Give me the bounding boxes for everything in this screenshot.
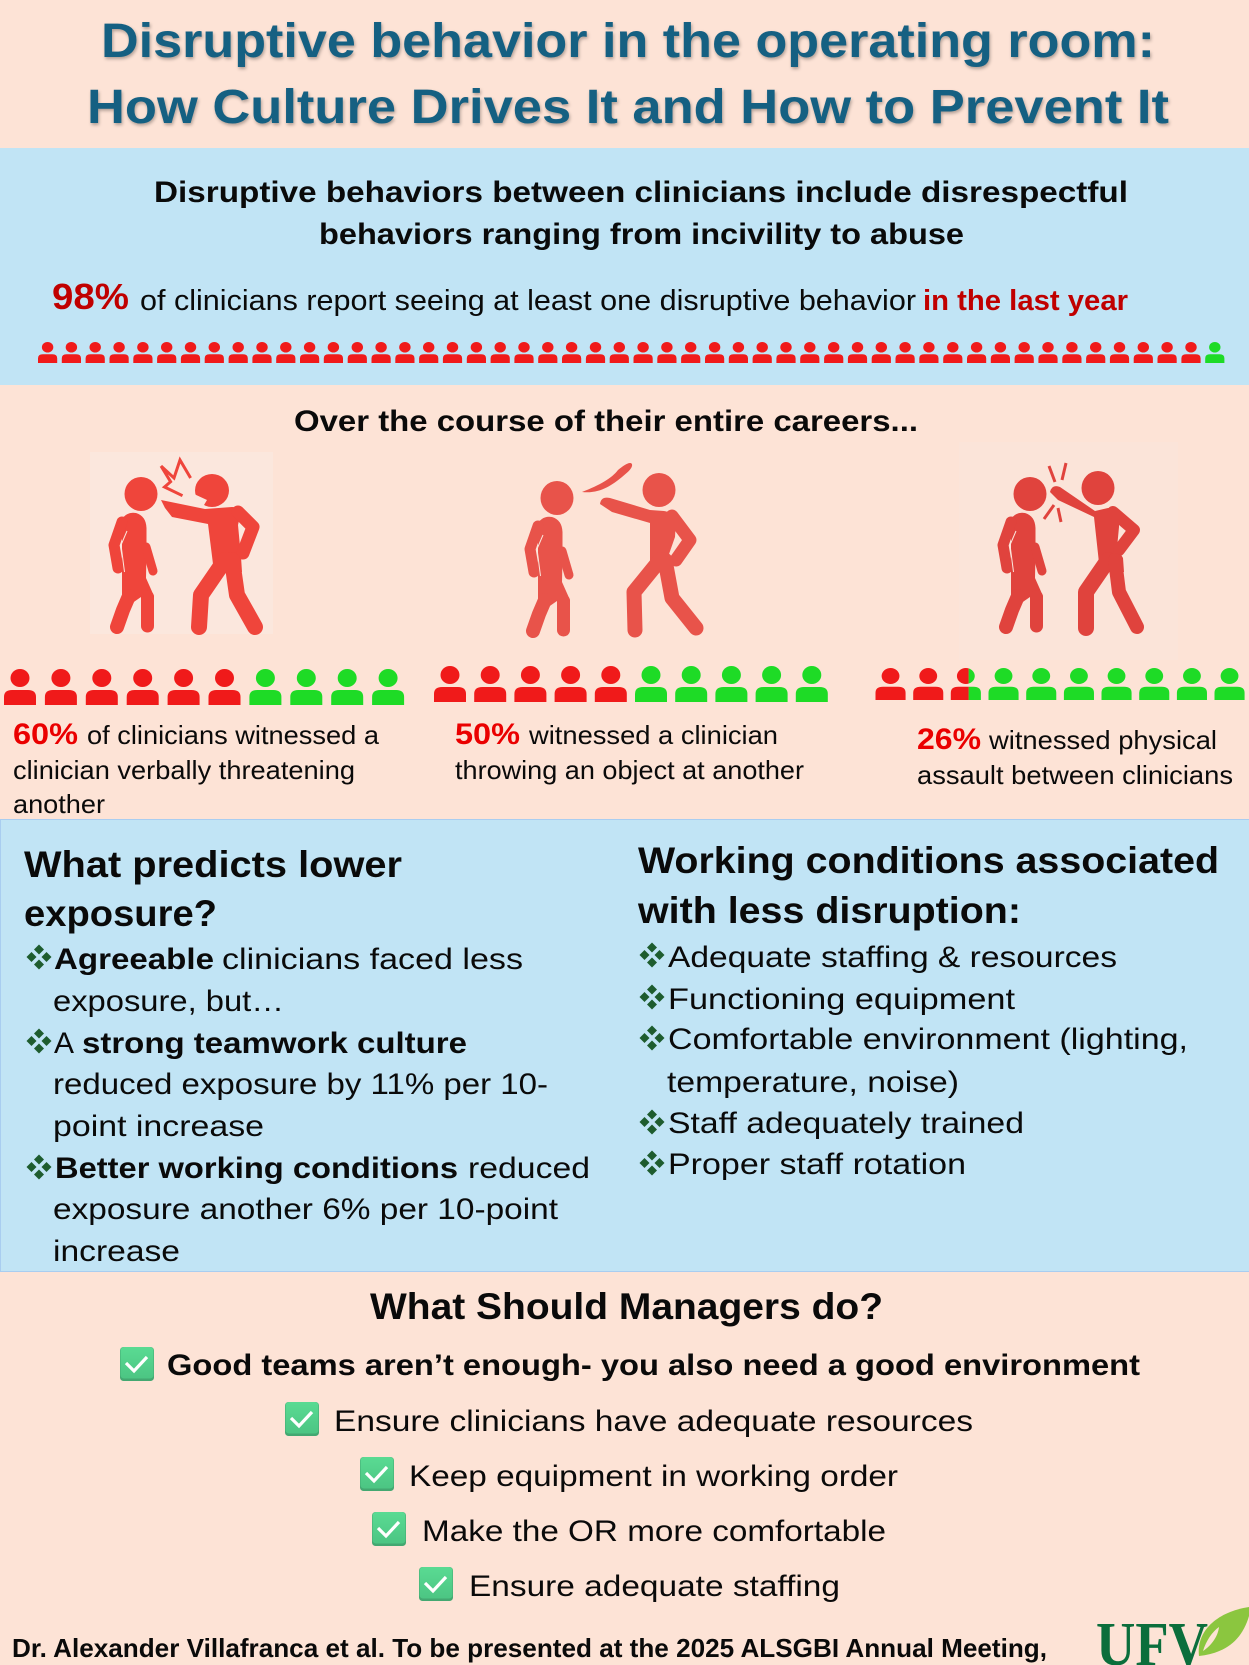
98% statistic (52, 276, 1128, 317)
title: How Culture Drives It and How to Prevent It (87, 81, 1169, 134)
98% statistic: of clinicians report seeing at least one disruptive behavior (140, 285, 916, 317)
heading: What Should Managers do? (370, 1286, 883, 1327)
heading: exposure? (24, 893, 217, 934)
bullet list: temperature, noise) (667, 1066, 959, 1099)
caption: 60%: 60% (13, 718, 78, 751)
column: working conditions (637, 840, 1219, 1181)
title (87, 15, 1169, 134)
heading: What predicts lower (24, 844, 402, 885)
pictogram: 2.6 of 10 red (876, 668, 1245, 700)
checklist item 4: Make the OR more comfortable (422, 1515, 886, 1548)
bullet: agreeable: exposure, but… (53, 985, 284, 1018)
bullet list: Staff adequately trained (668, 1107, 1024, 1140)
98% statistic: in the last year (923, 285, 1128, 317)
bullet: teamwork: strong teamwork culture (82, 1027, 467, 1060)
icon: thrown object (530, 463, 696, 631)
title: Disruptive behavior in the operating room: (101, 15, 1155, 68)
panel: what should managers do (120, 1286, 1140, 1603)
checklist item 1: Good teams aren’t enough- you also need a good environment (167, 1349, 1140, 1382)
bullet: agreeable (26, 943, 523, 1018)
definition heading: Disruptive behaviors between clinicians include disrespectful (154, 176, 1128, 209)
bullet: working conditions (26, 1152, 590, 1268)
bullet: working conditions: exposure another 6% per 10-point (53, 1193, 559, 1226)
caption: 26%: 26% (917, 723, 981, 756)
bullet: teamwork: reduced exposure by 11% per 10- (53, 1068, 548, 1101)
icon: physical assault (959, 442, 1178, 660)
definition heading: behaviors ranging from incivility to abuse (319, 218, 964, 251)
caption: 26%: witnessed physical (988, 725, 1217, 755)
caption: 26% (917, 723, 1233, 790)
panel: definition and last-year statistic (0, 148, 1249, 385)
caption: 50%: throwing an object at another (455, 755, 804, 785)
heading: with less disruption: (637, 890, 1021, 931)
heading: Working conditions associated (638, 840, 1219, 881)
pictogram: 6 of 10 red (4, 669, 404, 705)
bullet: agreeable: clinicians faced less (222, 943, 523, 976)
bullet: teamwork: A (54, 1027, 74, 1060)
panel: verbal threat (4, 452, 404, 819)
checklist item 5: Ensure adequate staffing (469, 1570, 840, 1603)
panel: predictors and working conditions (0, 820, 1249, 1272)
bullet list: Adequate staffing & resources (668, 941, 1117, 974)
checklist item 2: Ensure clinicians have adequate resources (334, 1405, 973, 1438)
bullet: working conditions: Better working conditions (55, 1152, 458, 1185)
bullet: agreeable: Agreeable (54, 943, 214, 976)
definition heading (154, 176, 1128, 251)
caption: 50%: witnessed a clinician (528, 720, 778, 750)
bullet: working conditions: reduced (468, 1152, 590, 1185)
pictogram: 49 red and 1 green person (38, 342, 1224, 363)
bullet list: Functioning equipment (668, 983, 1016, 1016)
bullet: teamwork (26, 1027, 548, 1143)
bullet list: Comfortable environment (lighting, (668, 1023, 1188, 1056)
checklist item 3: Keep equipment in working order (409, 1460, 898, 1493)
column: what predicts lower exposure (24, 844, 590, 1268)
caption: 50% (455, 718, 804, 785)
caption: 26%: assault between clinicians (917, 760, 1233, 790)
career section heading: Over the course of their entire careers... (294, 405, 918, 438)
footer citation: Dr. Alexander Villafranca et al. To be presented at the 2025 ALSGBI Annual Meeting, (12, 1633, 1047, 1663)
caption: 50%: 50% (455, 718, 520, 751)
panel: physical assault (876, 442, 1245, 790)
bullet: working conditions: increase (53, 1235, 180, 1268)
caption: 60%: of clinicians witnessed a (87, 720, 380, 750)
bullet list: Proper staff rotation (668, 1148, 966, 1181)
heading (637, 840, 1219, 931)
caption: 60% (13, 718, 380, 819)
caption: 60%: clinician verbally threatening (13, 755, 355, 785)
panel: thrown object (434, 463, 828, 785)
heading (24, 844, 402, 934)
pictogram: 5 of 10 red (434, 666, 828, 702)
98% statistic: 98% (52, 276, 129, 317)
caption: 60%: another (13, 789, 105, 819)
bullet list (640, 941, 1188, 1181)
bullet: teamwork: point increase (53, 1110, 264, 1143)
icon: verbal threat (90, 452, 273, 634)
